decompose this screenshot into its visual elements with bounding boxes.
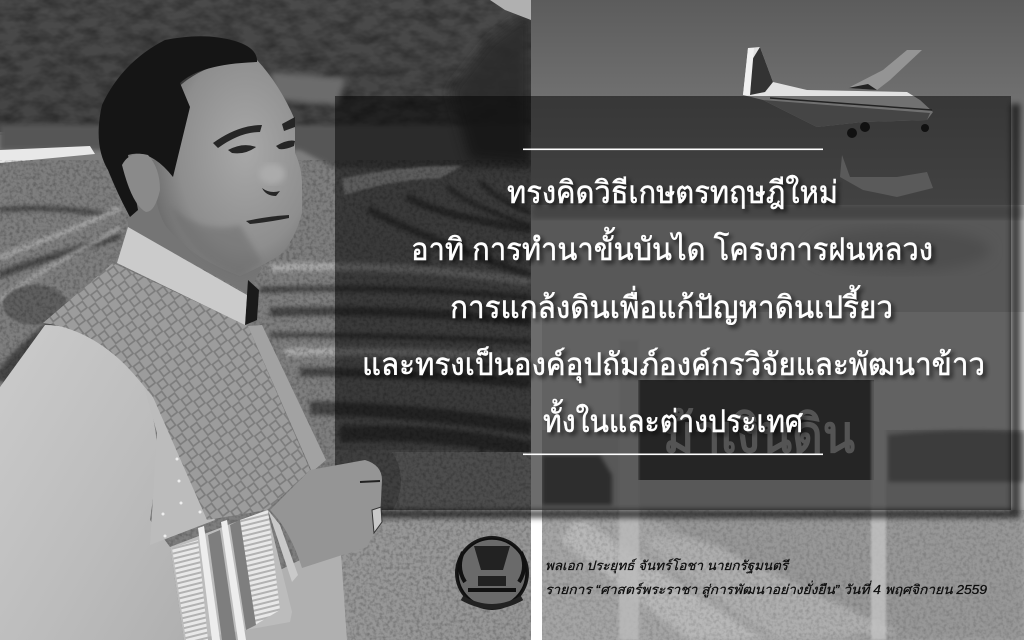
rule: bottom: [523, 454, 823, 455]
cuff: [170, 510, 292, 640]
white divider strip: [531, 510, 542, 520]
ring: [372, 507, 382, 533]
plane 2: [840, 155, 933, 197]
dark inner collar: [245, 280, 259, 325]
headline text block: [362, 175, 985, 439]
lower garment: [190, 540, 347, 640]
hand: [270, 460, 382, 568]
plane 1: [743, 47, 933, 138]
photo: aircraft over fields with sign: ม้าเงินดิน: [663, 406, 855, 464]
source: รายการ “ศาสตร์พระราชา สู่การพัฒนาอย่างยั่งยืน” วันที่ 4 พฤศจิกายน 2559: [545, 580, 987, 598]
person: man in patterned Thai jacket: [0, 36, 382, 640]
jacket placket: [248, 325, 326, 472]
panel: translucent dark overlay: [335, 96, 1020, 518]
ear: [122, 154, 160, 212]
face: [154, 60, 302, 276]
neck: [128, 200, 262, 293]
knuckle shadow: [360, 481, 380, 482]
sleeve: [0, 325, 184, 640]
line 1: ทรงคิดวิธีเกษตรทฤษฎีใหม่: [507, 175, 838, 210]
cheek and forehead shading: [170, 205, 262, 276]
sign board: [638, 380, 874, 480]
icon: government seal: [455, 536, 529, 610]
terrace bands: [0, 180, 531, 452]
photo: rice terraces and hillside: [0, 0, 531, 640]
nose highlight: [259, 164, 285, 184]
rule: top: [523, 148, 823, 150]
line 2: อาทิ การทำนาขั้นบันได โครงการฝนหลวง: [411, 227, 933, 267]
patterned vest: [43, 263, 310, 520]
photo: aircraft over fields with sign: [531, 0, 1024, 640]
front panel with sequins: [143, 383, 215, 545]
line 3: การแกล้งดินเพื่อแก้ปัญหาดินเปรี้ยว: [450, 285, 893, 325]
hair: [99, 36, 257, 217]
cuff stripes: [172, 540, 208, 640]
line 4: และทรงเป็นองค์อุปถัมภ์องค์กรวิจัยและพัฒนาข้าว: [362, 346, 985, 384]
speaker: พลเอก ประยุทธ์ จันทร์โอชา นายกรัฐมนตรี: [545, 558, 790, 574]
stand collar: [117, 227, 247, 325]
eyes and brow: [213, 117, 295, 224]
cuff bands: [198, 526, 220, 640]
line 5: ทั้งในและต่างประเทศ: [543, 399, 803, 439]
inner shirt cuff: [268, 510, 298, 582]
caption: speaker and source: [545, 558, 987, 598]
